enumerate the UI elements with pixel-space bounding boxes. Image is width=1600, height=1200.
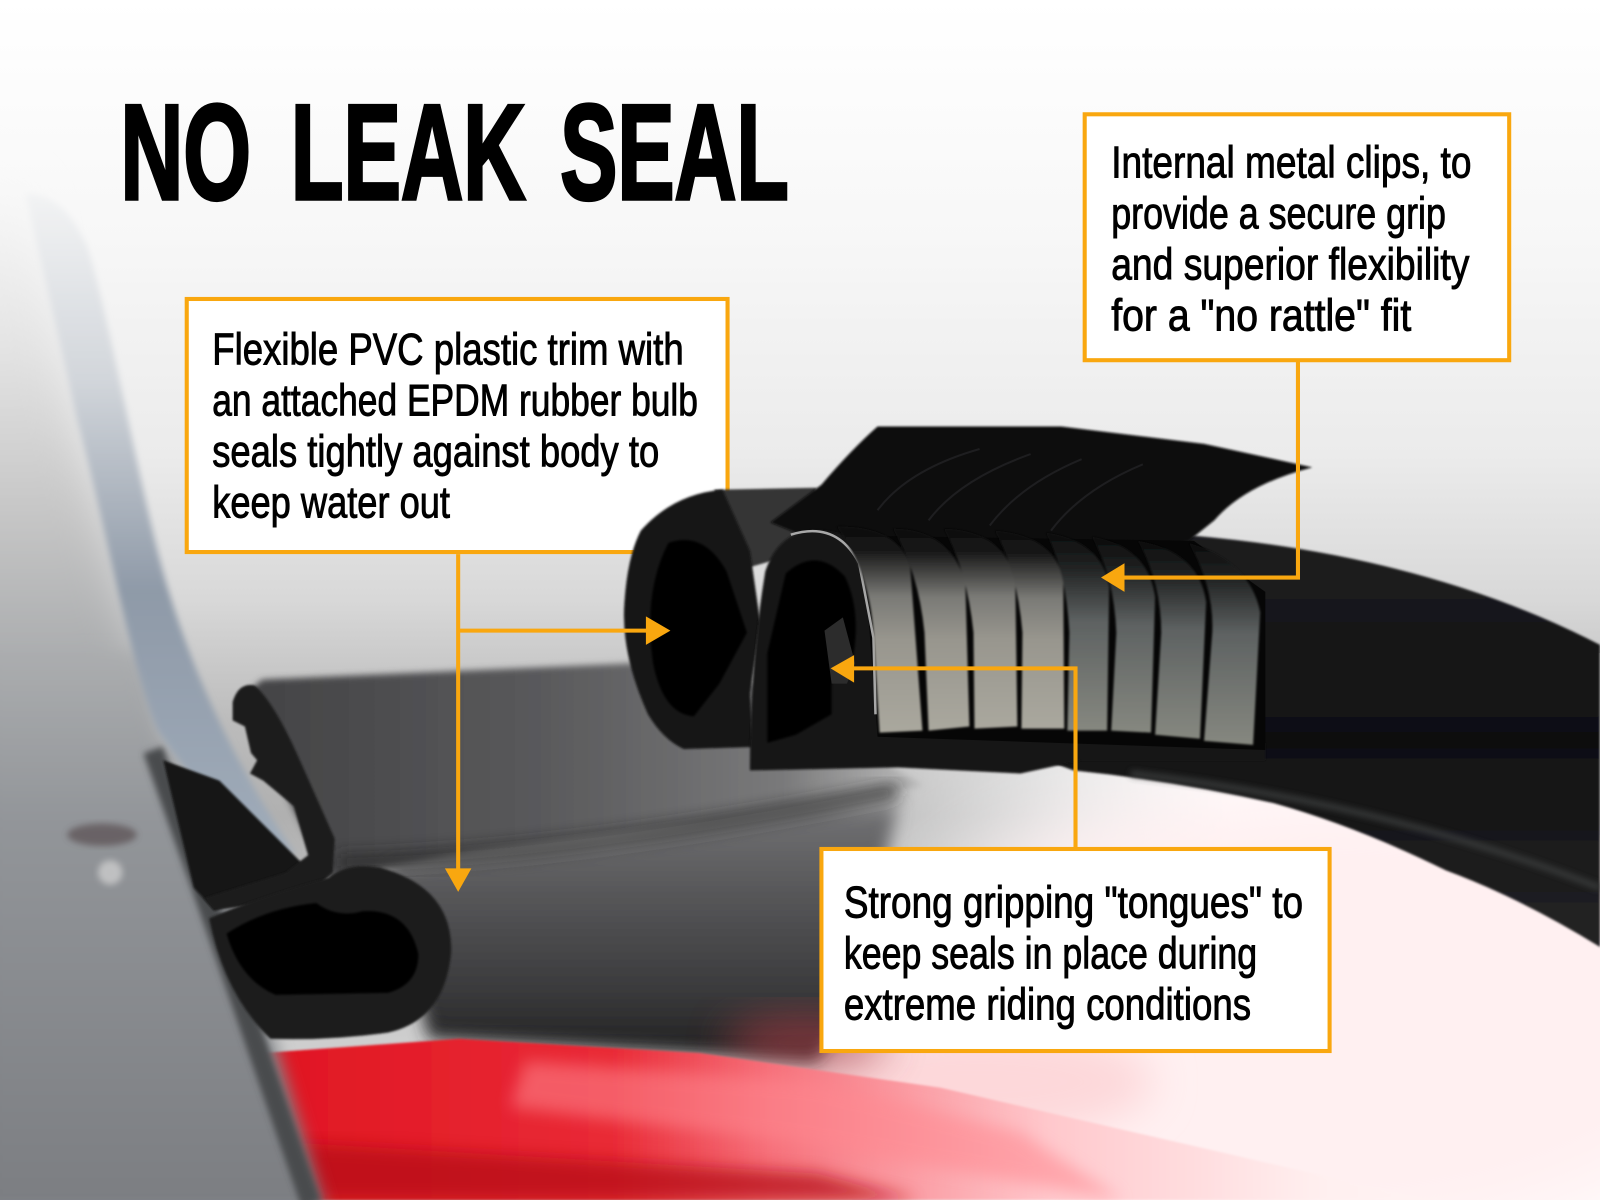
lower pillar: [0, 653, 327, 1200]
left seal cross-section: [163, 685, 451, 1039]
callout text: [212, 323, 698, 527]
callout text: Internal metal clips, to: [1111, 137, 1471, 188]
bulb: [624, 490, 760, 749]
red body highlight: [510, 1061, 1122, 1200]
metal clip strips: [837, 527, 1260, 745]
tail of seal: [918, 536, 1600, 947]
upper clip arm: [204, 685, 335, 910]
pale pink glow on the lower right: [898, 786, 1600, 1200]
callout text: seals tightly against body to: [212, 425, 659, 476]
pink glow beneath the tongues callout: [806, 1026, 1153, 1138]
red car body: [263, 1039, 1429, 1200]
blue-grey door strip: [26, 194, 296, 855]
clip backing: [862, 536, 1265, 750]
callout text: an attached EPDM rubber bulb: [212, 374, 698, 425]
bulb outer: [209, 866, 451, 1039]
fin ribs: [878, 449, 1143, 531]
callout text: Flexible PVC plastic trim with: [212, 323, 684, 374]
callout: PVC trim: [187, 299, 728, 552]
silver clip edge: [791, 531, 876, 714]
callout text: keep seals in place during: [844, 927, 1257, 978]
shadow between rubber strips: [337, 791, 898, 862]
title: SEAL: [560, 76, 789, 228]
bulb hole: [650, 540, 747, 716]
callout text: keep water out: [212, 476, 450, 527]
arrow: trim down to strip and across to bulb: [445, 554, 670, 892]
callout text: and superior flexibility: [1111, 239, 1470, 290]
title: NO: [120, 76, 251, 228]
callout text: [1111, 137, 1471, 341]
pillar light patch: [98, 860, 122, 885]
title: [120, 76, 789, 228]
channel body: [750, 530, 1265, 773]
dark red glow under front strip: [724, 1014, 888, 1071]
callout text: Strong gripping "tongues" to: [844, 876, 1303, 927]
callout text: [844, 876, 1303, 1029]
rear rubber strip: [240, 663, 923, 878]
bulb hole: [227, 903, 418, 995]
gripping tongue: [824, 617, 855, 684]
callout text: provide a secure grip: [1111, 188, 1446, 239]
black gap ribs: [163, 760, 306, 910]
callout: tongues: [821, 849, 1330, 1051]
pillar dark edge: [153, 750, 311, 1200]
grey door pillar: [0, 153, 327, 1200]
main seal: [624, 427, 1600, 947]
title: LEAK: [291, 76, 526, 228]
arrow: metal clips: [1101, 360, 1298, 592]
callout text: for a "no rattle" fit: [1111, 290, 1412, 341]
front rubber strip: [388, 806, 898, 1061]
pillar shadow patch: [67, 823, 137, 846]
callout: metal clips: [1085, 114, 1509, 360]
soft upper pillar: [0, 153, 153, 714]
red body shadow: [296, 1143, 918, 1200]
channel hole: [767, 560, 856, 743]
fin: [770, 427, 1312, 571]
tail highlight: [1131, 773, 1600, 888]
arrow: gripping tongues: [831, 655, 1076, 848]
callout text: extreme riding conditions: [844, 978, 1251, 1029]
rear tube top: [714, 488, 816, 571]
